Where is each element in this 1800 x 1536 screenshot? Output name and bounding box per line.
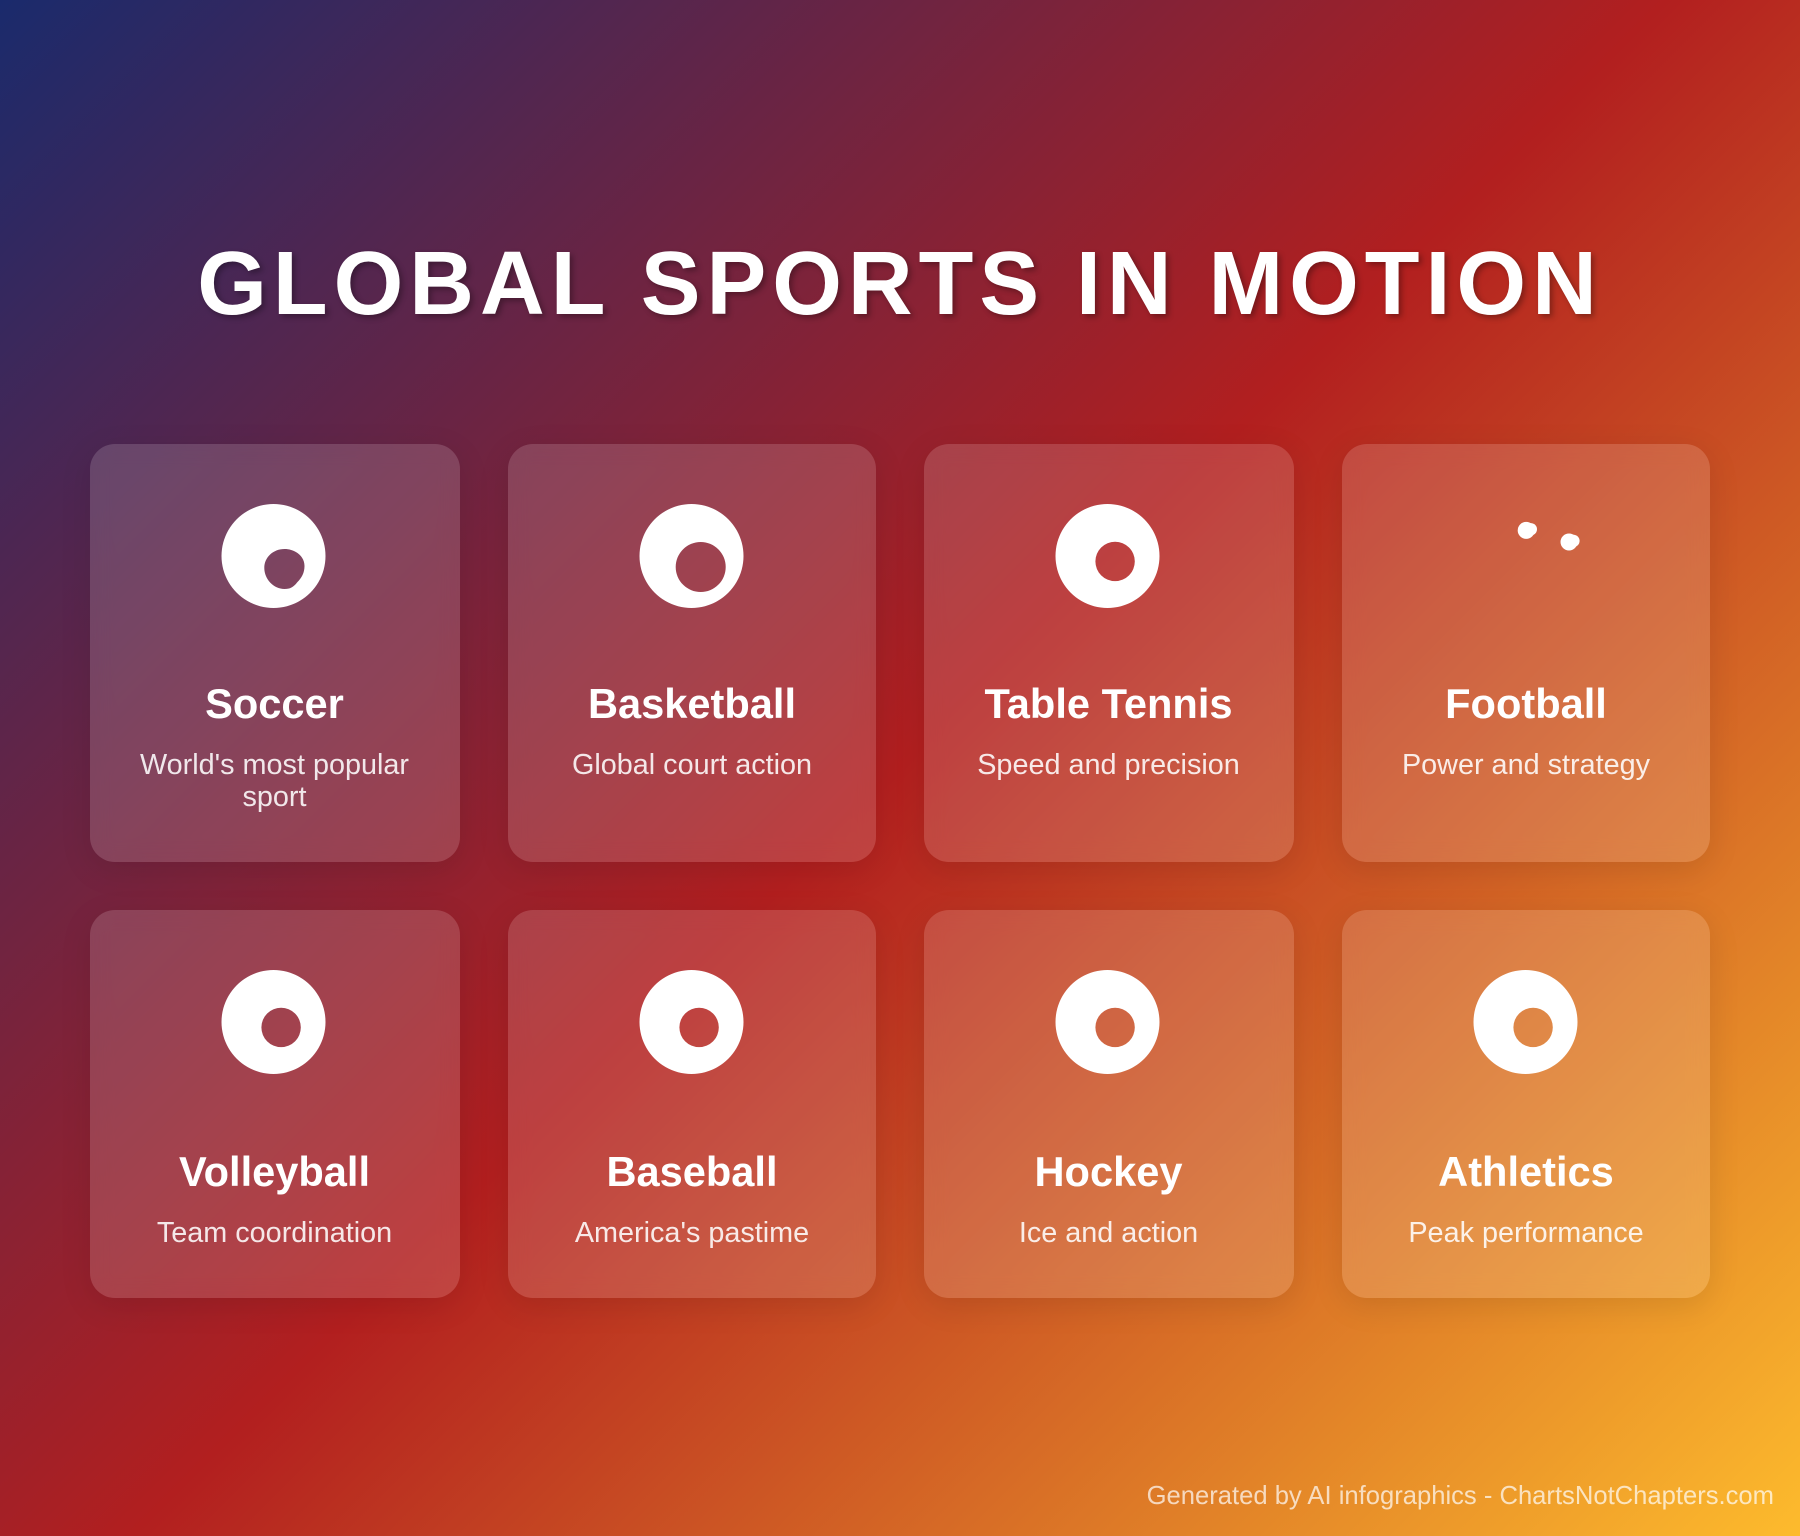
icon: athletics <box>1474 970 1578 1074</box>
panel: hockey <box>924 910 1294 1298</box>
panel: table tennis <box>924 444 1294 862</box>
title: GLOBAL SPORTS IN MOTION <box>197 233 1603 333</box>
panel: volleyball <box>90 910 460 1298</box>
heading: football: Football <box>1445 680 1607 727</box>
panel: baseball <box>508 910 876 1298</box>
heading: soccer: Soccer <box>205 680 344 727</box>
icon: football <box>1518 522 1580 550</box>
icon: table tennis <box>1056 504 1160 608</box>
icon: basketball <box>640 504 744 608</box>
heading: baseball: Baseball <box>606 1148 778 1195</box>
icon: baseball <box>640 970 744 1074</box>
panel: basketball <box>508 444 876 862</box>
text: basketball description: Global court action <box>572 749 812 781</box>
heading: volleyball: Volleyball <box>179 1148 370 1195</box>
heading: table tennis: Table Tennis <box>984 680 1233 727</box>
footer credit: Generated by AI infographics - ChartsNotChapters.com <box>1147 1482 1774 1510</box>
icon: soccer <box>222 504 326 608</box>
text: hockey description: Ice and action <box>1019 1217 1198 1249</box>
text: football description: Power and strategy <box>1402 749 1650 781</box>
heading: athletics: Athletics <box>1438 1148 1614 1195</box>
panel: soccer <box>90 444 460 862</box>
text: table tennis description: Speed and precision <box>977 749 1240 781</box>
text: baseball description: America's pastime <box>575 1217 809 1249</box>
text: athletics description: Peak performance <box>1408 1217 1644 1249</box>
panel: football <box>1342 444 1710 862</box>
icon: hockey <box>1056 970 1160 1074</box>
text: soccer description: World's most popular sport <box>140 749 409 813</box>
icon: volleyball <box>222 970 326 1074</box>
heading: hockey: Hockey <box>1034 1148 1182 1195</box>
heading: basketball: Basketball <box>588 680 796 727</box>
panel: athletics <box>1342 910 1710 1298</box>
text: volleyball description: Team coordination <box>157 1217 392 1249</box>
